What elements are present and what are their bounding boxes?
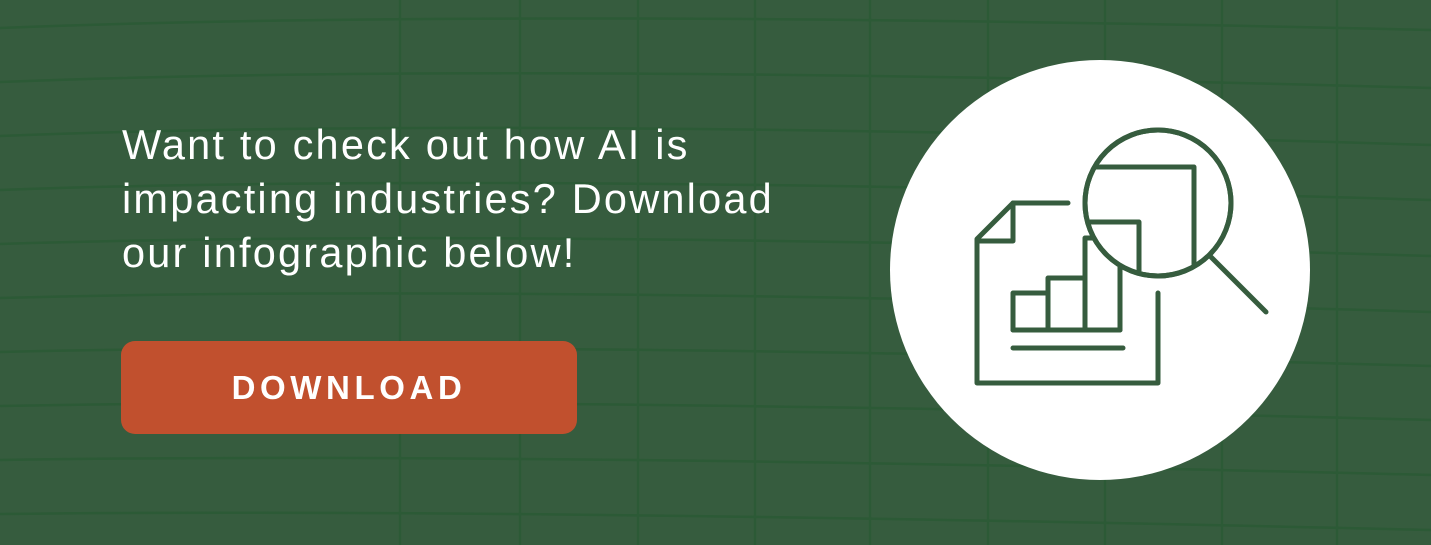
headline text bbox=[122, 121, 774, 276]
headline text: our infographic below! bbox=[122, 229, 576, 276]
download button bbox=[121, 341, 577, 434]
headline text: impacting industries? Download bbox=[122, 175, 774, 222]
headline text: Want to check out how AI is bbox=[122, 121, 690, 168]
download button: DOWNLOAD bbox=[232, 368, 466, 406]
icon: document with chart and magnifier in white circle bbox=[890, 60, 1310, 480]
